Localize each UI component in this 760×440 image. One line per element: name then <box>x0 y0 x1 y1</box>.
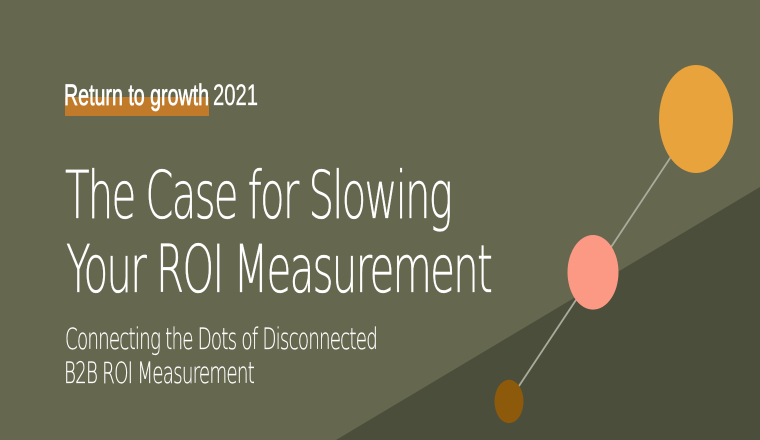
dark diagonal wedge <box>336 187 760 440</box>
title <box>65 157 491 308</box>
dot: brown <box>494 380 524 423</box>
connecting line <box>509 119 696 401</box>
title: Your ROI Measurement <box>66 231 491 308</box>
dot: orange <box>659 65 733 173</box>
subtitle <box>64 322 377 390</box>
dot: pink <box>568 235 618 310</box>
eyebrow highlight bar <box>65 97 209 116</box>
subtitle: Connecting the Dots of Disconnected <box>65 322 377 356</box>
eyebrow: Return to growth 2021: 2021 <box>213 79 258 112</box>
title: The Case for Slowing <box>65 157 451 234</box>
subtitle: B2B ROI Measurement <box>64 356 255 390</box>
eyebrow: Return to growth 2021: Return to growth <box>64 79 209 112</box>
